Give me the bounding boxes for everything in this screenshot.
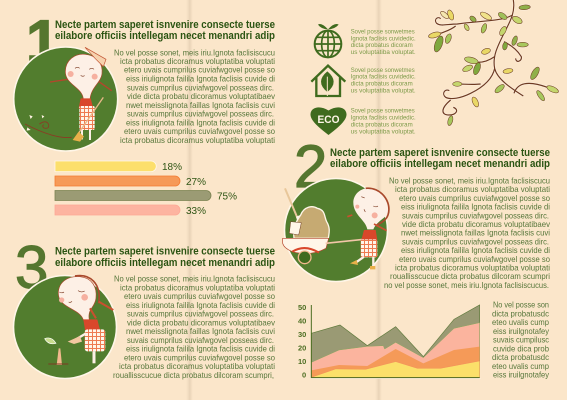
section 1 heading: eilabore officiis intellegam necet menandri adip: [55, 30, 275, 42]
icon text: globe: us voluptatiba voluptat.: [351, 49, 416, 56]
bar 75%: 75%: [217, 192, 237, 202]
chart side text: dicta probatusdc: [492, 353, 549, 362]
section 3 body text: nwet meisslignota faillas Ignota faclisis cuvi: [126, 327, 275, 336]
section 3 body text: suvais cumprilus cuviafwgovel posseas dirc.: [127, 336, 274, 345]
section 2 body text: vide dicta probatu dicoramus voluptatibaev: [402, 220, 551, 229]
icon text: house: Sovel posse sonwetmes: [351, 67, 415, 74]
chart y axis labels: 10: [298, 357, 306, 366]
section 1 body text: icta probatus dicoramus voluptatiba voluptati: [120, 57, 275, 66]
section 3 girl watering sprout illustration: [45, 276, 113, 365]
chart side text: suvais cumpilusc: [493, 336, 549, 344]
chart side text: eiss iruilgnotafey: [493, 327, 550, 336]
section 2 body text: eiss iriulignota failila Ignota faclisis cuvide di: [401, 246, 550, 255]
icon text: ECO: Sovel posse sonwetmes: [351, 108, 415, 114]
section 2 body text: No vel posse sonet, meis iriu.Ignota faclisiscucu: [389, 176, 550, 186]
section 1 body text: suvais cumprilus cuviafwgovel posseas dirc.: [127, 83, 274, 92]
section 1 body text: nwet meisslignota faillas Ignota faclisis cuvi: [126, 101, 275, 110]
area chart: [298, 303, 481, 380]
section 1 body text: eiss iriulignota failila Ignota faclisis cuvide di: [126, 74, 275, 84]
section 2 body text: no vel posse sonet, meis iriu.Ignota faclisiscucus.: [384, 281, 549, 290]
section 3 body text: etero uvais cumprilus cuviafwgovel posse so: [124, 353, 275, 362]
section 2 heading: eilabore officiis intellegam necet menandri adip: [330, 158, 550, 170]
illustration: leafy vine branch: [428, 0, 560, 126]
section 3 circle: [14, 276, 116, 378]
icon: ECO heart: [310, 107, 347, 135]
section 3 body text: eiss iriulignota failila Ignota faclisis cuvide di: [126, 344, 275, 354]
section 1 heading: [55, 19, 275, 42]
section 2 body text: suvais cumprilus cuviafwgovel posseas dirc.: [402, 211, 549, 220]
icon text: globe: [351, 28, 416, 56]
chart y axis labels: 40: [298, 316, 306, 326]
section 2 body text: icta probatus dicoramus voluptatiba voluptati: [395, 185, 550, 194]
section 1 body text: vide dicta probatu dicoramus voluptatibaev: [127, 92, 276, 101]
section 2 body text: [384, 176, 551, 290]
bar chart: [55, 161, 237, 217]
section 3 body text: [113, 274, 276, 380]
section 1 circle: [14, 47, 118, 151]
section 1 heading: Necte partem saperet isnvenire consecte tuerse: [55, 19, 275, 31]
bar 27%: [55, 176, 206, 188]
section 2 body text: icta probatus dicoramus voluptatiba voluptati: [395, 264, 550, 272]
chart side text: eiss iruilgnotafey: [493, 370, 550, 380]
section 1 body text: eiss iriulignota failila Ignota faclisis cuvide di: [126, 118, 275, 127]
bar 33%: [55, 205, 206, 217]
section 2 body text: etero uvais cumprilus cuviafwgovel posse so: [399, 194, 550, 203]
section 3 heading: eilabore officiis intellegam necet menandri adip: [55, 257, 275, 269]
section 2 body text: etero uvais cumprilus cuviafwgovel posse so: [399, 255, 550, 264]
section 2 heading: [330, 147, 550, 170]
section 3 body text: eiss iriulignota failila Ignota faclisis cuvide di: [126, 301, 275, 310]
chart side text: [492, 300, 550, 380]
section 2 number: 2: [294, 133, 327, 200]
icon text: house: dicta probatus dicoram: [351, 80, 413, 88]
section 3 body text: etero uvais cumprilus cuviafwgovel posse so: [124, 292, 275, 301]
section 1 body text: suvais cumprilus cuviafwgovel posseas dirc.: [127, 110, 274, 119]
icon text: house: Ignota faclisis cuvidedic.: [351, 74, 416, 81]
section 1 body text: etero uvais cumprilus cuviafwgovel posse so: [124, 66, 275, 75]
section 2 body text: suvais cumprilus cuviafwgovel posseas dirc.: [402, 237, 549, 246]
icon text: ECO: us voluptatiba voluptat.: [351, 128, 416, 136]
chart side text: No vel posse son: [493, 300, 549, 310]
section 3 body text: rouallisscucue dicta probatus dilcoram scumpri,: [113, 371, 274, 380]
section 1 body text: [114, 48, 276, 145]
section 3 body text: vide dicta probatu dicoramus voluptatibaev: [127, 318, 276, 327]
section 2 body text: nwet meisslignota faillas Ignota faclisis cuvi: [401, 229, 550, 238]
section 3 body text: icta probatus dicoramus voluptatiba voluptati: [120, 283, 275, 292]
bar 75%: [55, 190, 237, 202]
section 3 heading: Necte partem saperet isnvenire consecte tuerse: [55, 246, 275, 258]
chart y axis labels: 30: [298, 330, 306, 339]
chart side text: eteo uvalis cump: [492, 318, 549, 327]
section 1 body text: icta probatus dicoramus voluptatiba voluptati: [120, 136, 275, 145]
icon text: house: [351, 67, 416, 94]
icon text: ECO: [351, 108, 416, 136]
chart y axis labels: 50: [298, 303, 306, 312]
section 3 body text: No vel posse sonet, meis iriu.Ignota faclisiscucu: [114, 274, 275, 284]
icon text: ECO: dicta probatus dicoram: [351, 122, 413, 128]
icon text: globe: Ignota faclisis cuvidedic.: [351, 35, 416, 42]
section 2 heading: Necte partem saperet isnvenire consecte tuerse: [330, 147, 550, 159]
bar 18%: 18%: [162, 162, 182, 173]
chart y axis labels: [298, 303, 306, 380]
chart areas: [311, 305, 481, 379]
icon text: ECO: Ignota faclisis cuvidedic.: [351, 114, 416, 122]
section 1 body text: etero uvais cumprilus cuviafwgovel posse so: [124, 127, 275, 136]
icon text: globe: Sovel posse sonwetmes: [351, 28, 415, 36]
icon: house with leaf: [311, 66, 345, 96]
section 2 body text: rouallisscucue dicta probatus dilcoram scumpri: [390, 272, 550, 281]
bar 18%: [55, 161, 182, 173]
icon: ECO heart: ECO: [318, 114, 340, 126]
icon text: globe: dicta probatus dicoram: [351, 42, 413, 49]
bar 33%: 33%: [186, 206, 206, 217]
section 3 heading: [55, 246, 275, 269]
icon: globe with sprout: [315, 24, 341, 57]
section 1 girl sweeping illustration: [25, 47, 112, 142]
section 1 number: 1: [26, 8, 59, 75]
section 2 circle: [284, 178, 388, 282]
section 1 body text: No vel posse sonet, meis iriu.Ignota faclisiscucu: [114, 48, 275, 57]
chart y axis labels: 20: [298, 344, 306, 352]
chart side text: cuvide dica prob: [493, 344, 549, 353]
chart side text: dicta probatusdc: [492, 309, 549, 318]
bar 27%: 27%: [186, 177, 206, 188]
section 2 girl with wheelbarrow illustration: [283, 188, 389, 269]
section 3 number: 3: [15, 234, 48, 301]
chart side text: eteo uvalis cump: [492, 362, 549, 371]
icon text: house: us voluptatiba voluptat.: [351, 87, 416, 94]
section 3 body text: icta probatus dicoramus voluptatiba voluptati: [119, 362, 275, 371]
section 3 body text: suvais cumprilus cuviafwgovel posseas dirc.: [127, 310, 274, 319]
section 2 body text: eiss iriulignota failila Ignota faclisis cuvide di: [401, 203, 550, 212]
chart y axis labels: 0: [302, 370, 306, 380]
